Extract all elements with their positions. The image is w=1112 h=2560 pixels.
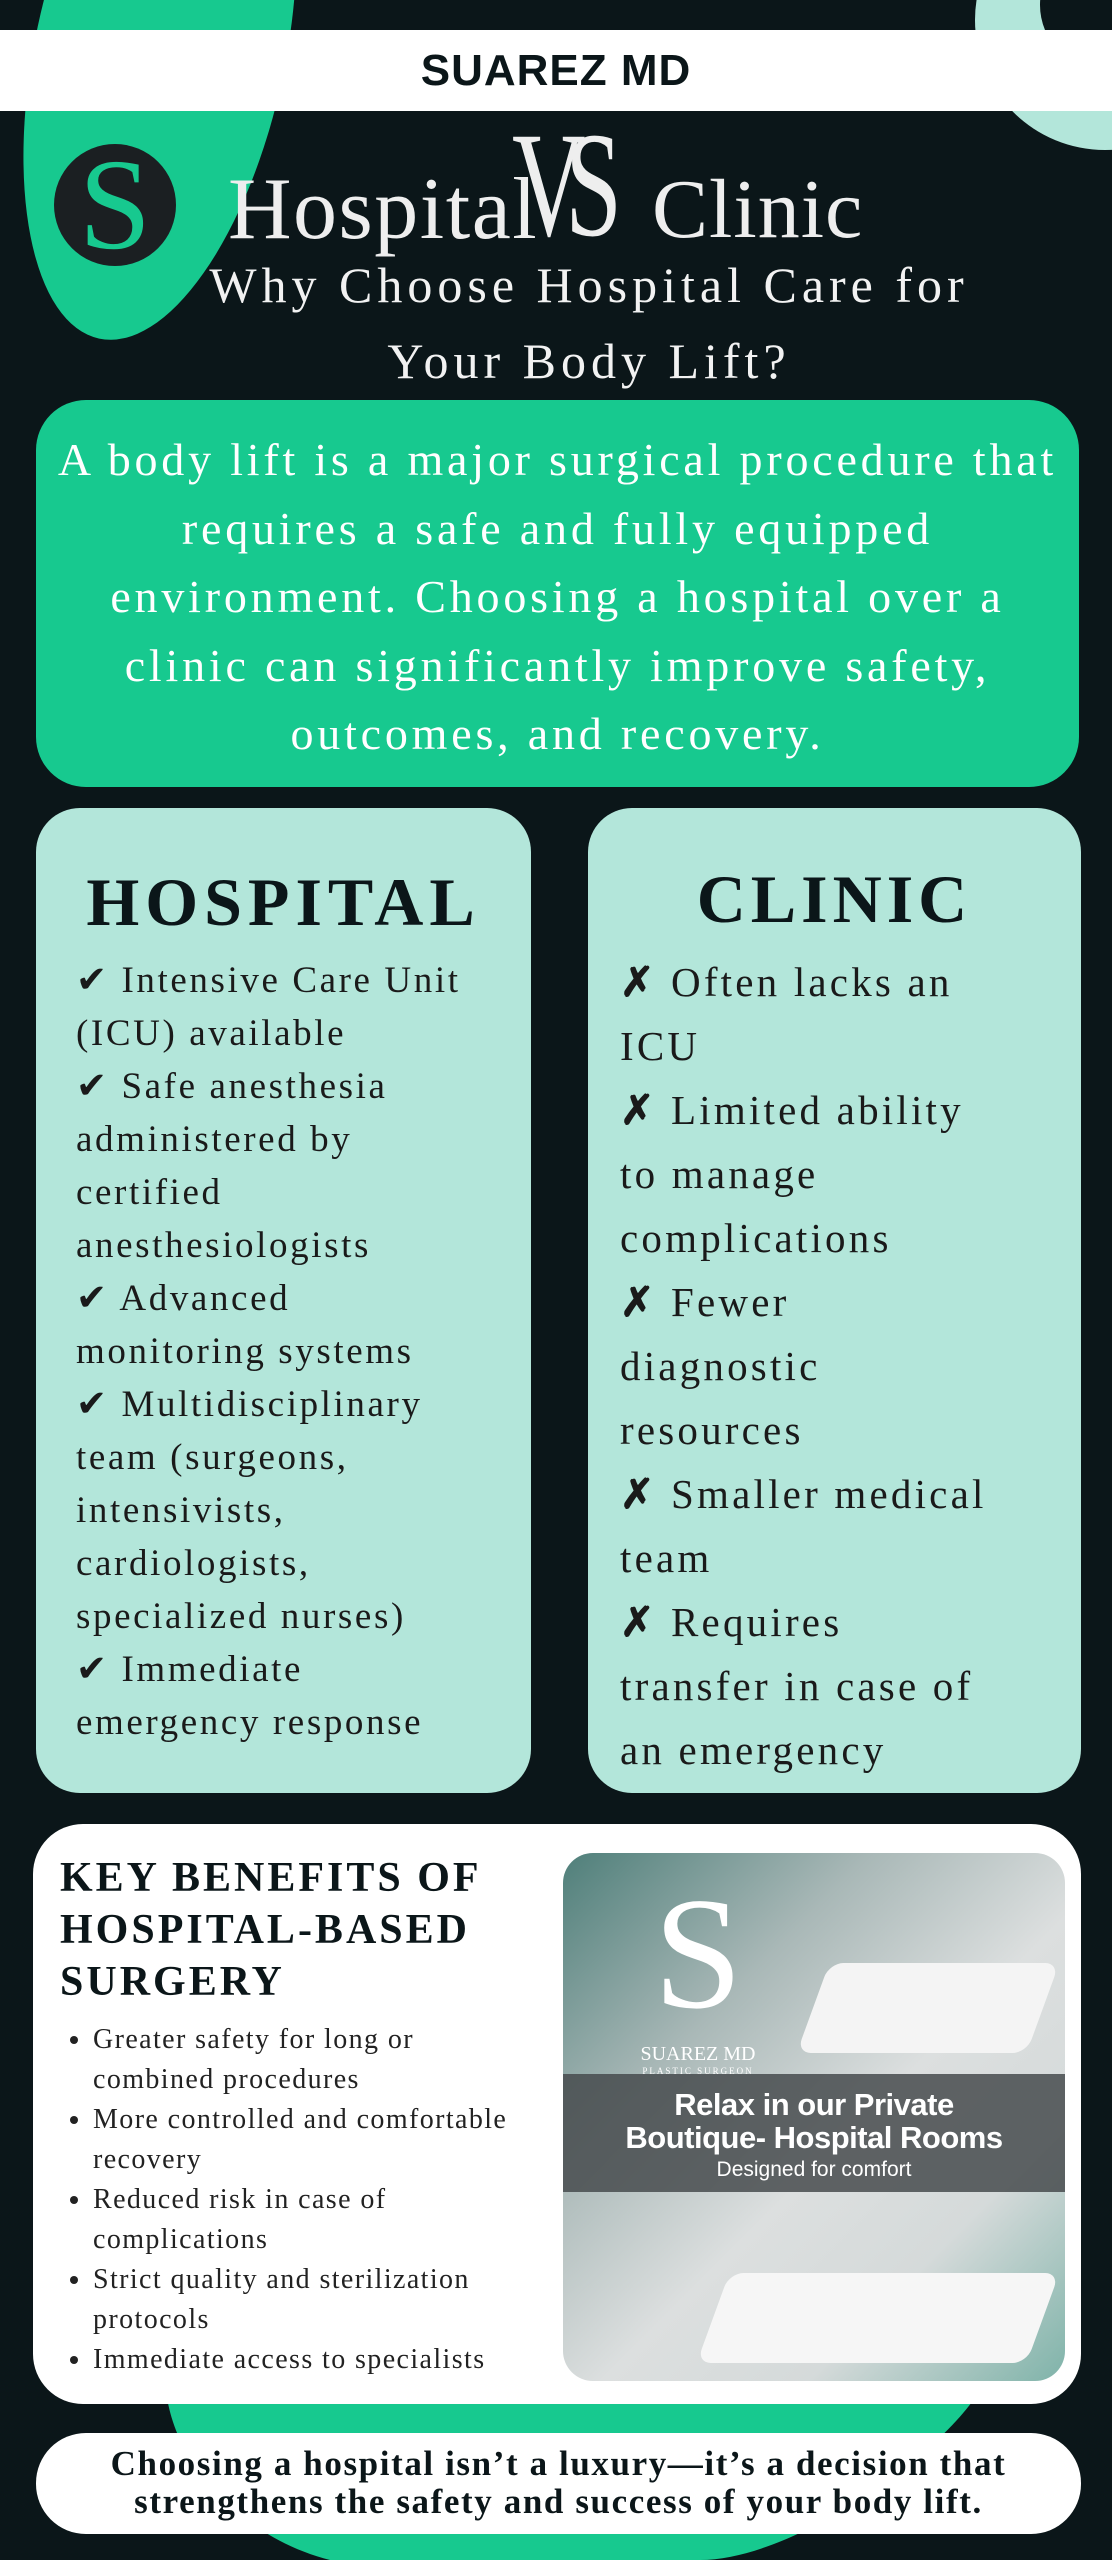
- panel: intro: outcomes, and recovery.: [290, 708, 824, 759]
- list: hospital advantages: [76, 960, 461, 1743]
- subtitle: [209, 257, 969, 389]
- list: hospital advantages: team (surgeons,: [76, 1437, 349, 1478]
- list: benefits: More controlled and comfortable: [93, 2104, 507, 2135]
- list: hospital advantages: emergency response: [76, 1702, 423, 1743]
- callout: conclusion: [36, 2433, 1081, 2534]
- logo in photo: SUAREZ MD: [640, 2043, 756, 2065]
- list: clinic limitations: [620, 959, 987, 1773]
- list: hospital advantages: ✔ Advanced: [76, 1278, 290, 1319]
- logo in photo: S: [654, 1864, 742, 2042]
- heading: key benefits: [60, 1855, 482, 2005]
- list: benefits: combined procedures: [93, 2064, 360, 2095]
- photo: hospital room: [563, 1853, 1065, 2381]
- panel: intro: [36, 400, 1079, 787]
- heading: key benefits: HOSPITAL-BASED: [60, 1907, 470, 1953]
- logo in photo: PLASTIC SURGEON: [642, 2066, 754, 2076]
- list: benefits: protocols: [93, 2304, 210, 2335]
- list: hospital advantages: ✔ Immediate: [76, 1649, 303, 1690]
- list: benefits: Reduced risk in case of: [93, 2184, 386, 2215]
- list: benefits: [70, 2024, 507, 2375]
- title: Hospital VS Clinic: Clinic: [652, 163, 863, 256]
- list: clinic limitations: transfer in case of: [620, 1663, 973, 1709]
- list: clinic limitations: ✗ Fewer: [620, 1279, 789, 1325]
- bed shapes: [797, 1963, 1059, 2053]
- list: clinic limitations: resources: [620, 1407, 804, 1453]
- caption band: [563, 2074, 1065, 2192]
- heading: key benefits: SURGERY: [60, 1959, 285, 2005]
- list: hospital advantages: cardiologists,: [76, 1543, 311, 1584]
- decorative green blob bottom: [168, 2404, 970, 2560]
- list: benefits: Strict quality and sterilization: [93, 2264, 470, 2295]
- header bar: [0, 30, 1112, 111]
- list: hospital advantages: ✔ Intensive Care Unit: [76, 960, 461, 1001]
- title: Hospital VS Clinic: VS: [512, 102, 602, 268]
- list: hospital advantages: specialized nurses): [76, 1596, 406, 1637]
- panel: key benefits: [33, 1824, 1081, 2404]
- icon: logo circle: [54, 144, 176, 266]
- list: clinic limitations: to manage: [620, 1151, 818, 1197]
- list: clinic limitations: ✗ Requires: [620, 1599, 842, 1645]
- panel: hospital: [36, 808, 531, 1793]
- title: Hospital VS Clinic: Hospital: [228, 161, 538, 258]
- list: benefits: Immediate access to specialists: [93, 2344, 486, 2375]
- list: benefits: Greater safety for long or: [93, 2024, 414, 2055]
- list: clinic limitations: complications: [620, 1215, 892, 1261]
- caption band: Designed for comfort: [717, 2158, 911, 2181]
- heading: hospital: HOSPITAL: [86, 864, 481, 940]
- panel: intro: environment. Choosing a hospital over a: [110, 571, 1005, 622]
- decorative mint circle top-right: [975, 0, 1112, 150]
- heading: clinic: CLINIC: [697, 861, 972, 937]
- subtitle: Why Choose Hospital Care for: [209, 257, 969, 313]
- list: clinic limitations: an emergency: [620, 1727, 886, 1773]
- list: hospital advantages: administered by: [76, 1119, 352, 1160]
- title: Hospital VS Clinic: [228, 102, 863, 268]
- icon: logo circle: S: [79, 133, 151, 277]
- callout: conclusion: strengthens the safety and success of your body lift.: [134, 2482, 983, 2521]
- logo in photo: [640, 1864, 756, 2076]
- list: hospital advantages: intensivists,: [76, 1490, 286, 1531]
- caption band: Boutique- Hospital Rooms: [625, 2120, 1003, 2155]
- decorative green blob top-left: [0, 0, 343, 365]
- header bar: SUAREZ MD: [421, 46, 691, 95]
- panel: intro: clinic can significantly improve safety,: [125, 640, 990, 690]
- list: hospital advantages: monitoring systems: [76, 1331, 414, 1372]
- list: hospital advantages: ✔ Multidisciplinary: [76, 1384, 423, 1425]
- list: hospital advantages: anesthesiologists: [76, 1225, 371, 1266]
- heading: key benefits: KEY BENEFITS OF: [60, 1855, 482, 1901]
- caption band: Relax in our Private: [674, 2087, 954, 2122]
- list: clinic limitations: ✗ Limited ability: [620, 1087, 964, 1133]
- callout: conclusion: Choosing a hospital isn’t a luxury—it’s a decision that: [111, 2444, 1006, 2483]
- list: hospital advantages: ✔ Safe anesthesia: [76, 1066, 388, 1107]
- list: clinic limitations: ✗ Often lacks an: [620, 959, 953, 1005]
- list: benefits: recovery: [93, 2144, 202, 2175]
- panel: clinic: [588, 808, 1081, 1793]
- panel: intro: requires a safe and fully equipped: [182, 502, 933, 554]
- panel: intro: A body lift is a major surgical procedure that: [58, 434, 1057, 485]
- subtitle: Your Body Lift?: [387, 333, 791, 389]
- list: clinic limitations: ICU: [620, 1023, 700, 1069]
- list: clinic limitations: diagnostic: [620, 1343, 821, 1389]
- list: clinic limitations: team: [620, 1535, 712, 1581]
- list: clinic limitations: ✗ Smaller medical: [620, 1471, 987, 1517]
- list: benefits: complications: [93, 2224, 268, 2255]
- list: hospital advantages: (ICU) available: [76, 1013, 346, 1054]
- list: hospital advantages: certified: [76, 1172, 223, 1213]
